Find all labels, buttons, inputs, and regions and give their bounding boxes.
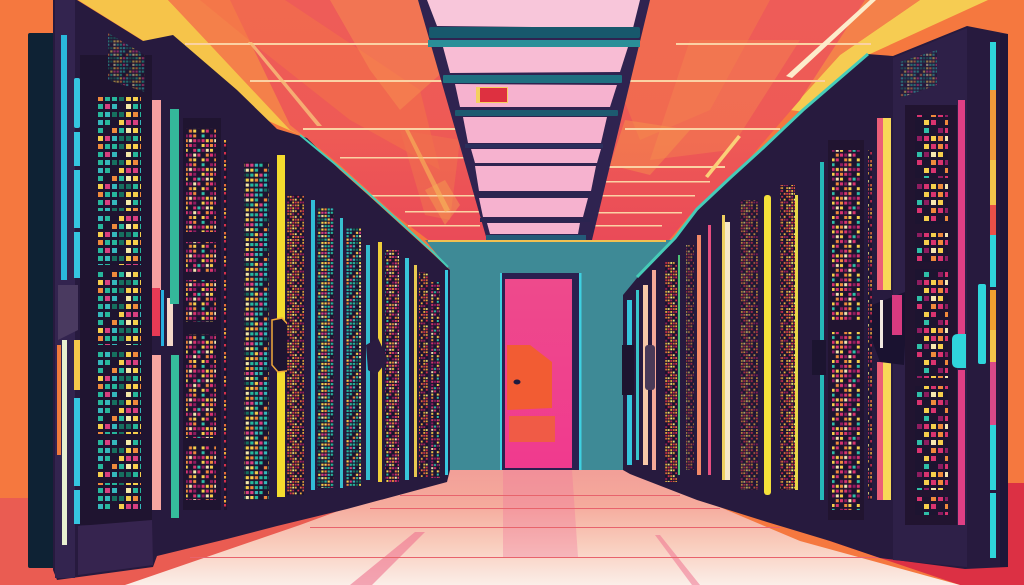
grille [900, 50, 937, 98]
grille [108, 33, 145, 92]
rack 1 [55, 0, 153, 578]
right rack silhouette [623, 26, 1008, 569]
door reflection [503, 470, 578, 557]
right server racks [622, 26, 1008, 569]
rack 2 [170, 109, 227, 518]
floor [125, 470, 960, 585]
light panels [427, 0, 640, 234]
exit sign [476, 87, 508, 103]
strips [952, 42, 996, 558]
left rack side panel [28, 33, 58, 568]
pink strip and latch [152, 100, 173, 510]
left floor band [0, 470, 450, 585]
left rack silhouette [53, 0, 450, 580]
ceiling edge line [428, 240, 666, 242]
ceiling light lines [185, 0, 876, 226]
right rack 3 [740, 162, 826, 500]
door patches [507, 345, 555, 442]
right floor band [620, 470, 1024, 585]
ceiling colour patches [200, 0, 800, 225]
right rack 1 [893, 28, 1008, 567]
light panel strip [418, 0, 650, 240]
led field [98, 97, 141, 510]
door knob [514, 380, 520, 384]
back wall [425, 240, 672, 470]
left server racks [28, 0, 450, 580]
rack 5 [346, 228, 399, 486]
rack 3 [244, 155, 295, 500]
rack 4 [287, 195, 343, 495]
latch [872, 292, 905, 365]
strips [57, 35, 80, 545]
rack top accent [300, 135, 448, 267]
indicator dots [224, 140, 227, 510]
right rack 4 [665, 215, 730, 482]
right rack 5 [622, 270, 656, 470]
handle [58, 285, 78, 340]
crossbars [428, 27, 640, 240]
right rack 2 [828, 118, 905, 520]
ceiling [78, 0, 988, 245]
door [500, 273, 582, 470]
rack 6 [405, 258, 448, 480]
right rack top accent [637, 54, 868, 277]
led field [915, 115, 948, 515]
